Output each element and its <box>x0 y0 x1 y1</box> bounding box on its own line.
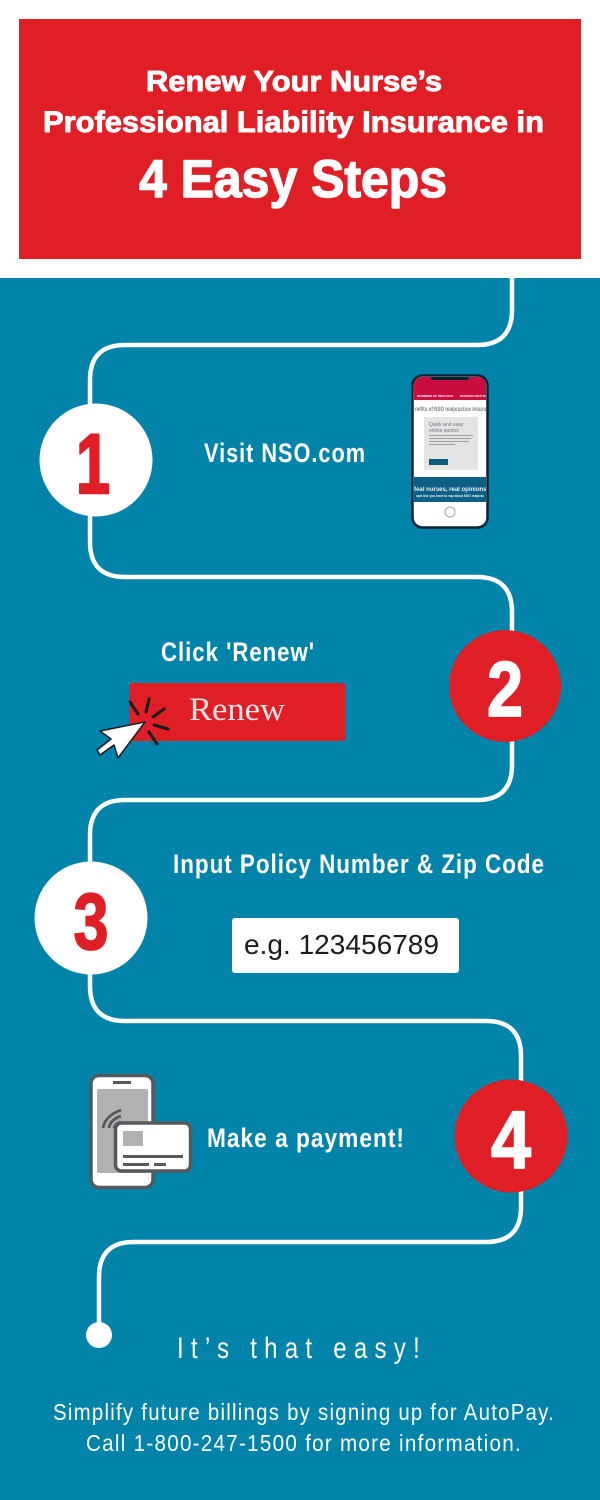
step 3 badge <box>34 862 148 974</box>
policy number input box <box>232 918 459 973</box>
title line 3: 4 Easy Steps <box>139 150 447 209</box>
step 4 label: Make a payment! <box>207 1123 405 1153</box>
step 4 badge: 4 <box>491 1095 531 1186</box>
autopay note: Call 1-800-247-1500 for more information. <box>86 1430 522 1456</box>
title line 2: Professional Liability Insurance in <box>43 106 544 139</box>
step 4 badge <box>454 1080 568 1192</box>
icon: phone showing NSO website: nefits of NSO malpractice insura <box>415 406 486 413</box>
step 2 badge: 2 <box>487 645 523 733</box>
renew button: Renew <box>189 692 285 728</box>
winding path connector <box>90 278 521 1335</box>
icon: phone showing NSO website: Quick and easy <box>429 422 464 428</box>
closing message: It’s that easy! <box>177 1332 427 1365</box>
icon: phone showing NSO website <box>412 376 490 528</box>
icon: phone showing NSO website: Real nurses, real opinions. <box>412 487 489 493</box>
step 2 badge <box>449 630 561 742</box>
icon: phone showing NSO website: NUMBERS OF PRACTICE <box>417 394 453 398</box>
title line 1: Renew Your Nurse’s <box>146 66 442 98</box>
step 2 label: Click 'Renew' <box>161 637 315 667</box>
icon: phone showing NSO website: online quotes <box>429 428 459 434</box>
icon: mouse cursor with click rays <box>97 699 168 758</box>
policy number input box: e.g. 123456789 <box>244 929 439 960</box>
title banner <box>19 19 581 259</box>
path end dot <box>86 1322 112 1348</box>
icon: phone and payment card <box>91 1076 190 1188</box>
step 1 badge: 1 <box>76 417 110 511</box>
step 3 badge: 3 <box>74 877 108 966</box>
step 1 label: Visit NSO.com <box>204 438 366 468</box>
icon: phone showing NSO website: ople like you have to say about NSO malprac <box>416 494 484 498</box>
renew button <box>129 683 345 741</box>
icon: phone showing NSO website: NURSING INSTITUTE <box>460 394 490 398</box>
autopay note <box>53 1399 555 1456</box>
step 1 badge <box>40 404 152 516</box>
